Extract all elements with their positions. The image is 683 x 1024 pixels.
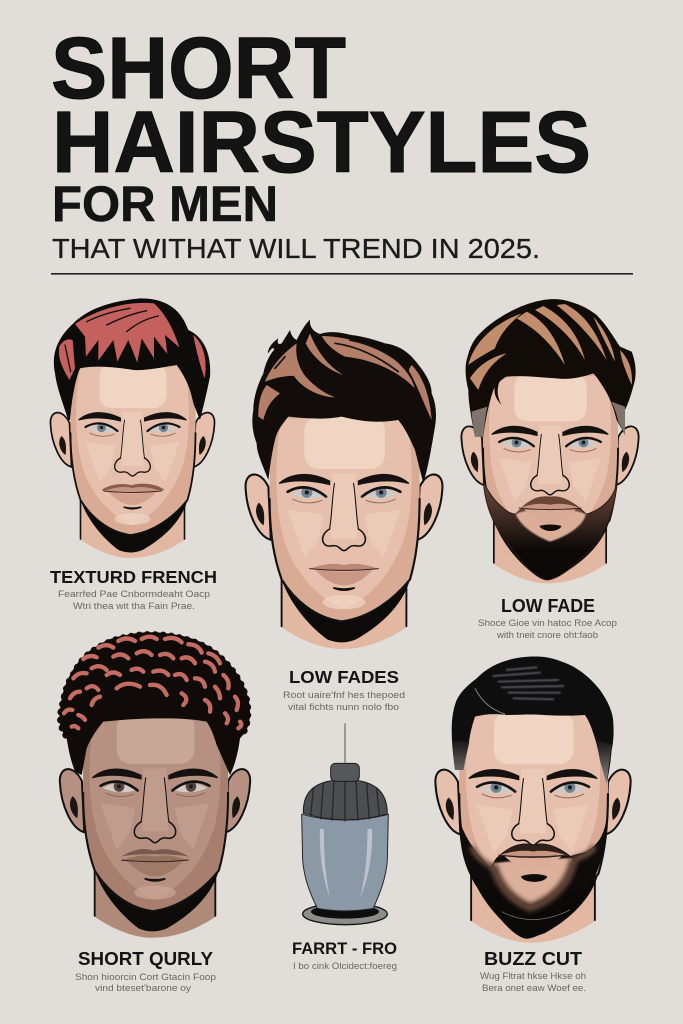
- face illustration: short qurly: [60, 710, 250, 938]
- panel: texturd french: [50, 298, 217, 611]
- description: low fades: vital fichts nunn nolo fbo: [288, 702, 399, 712]
- description: short qurly: [75, 972, 216, 993]
- hair: swept low fade: [466, 299, 636, 437]
- bottle cap: [303, 779, 387, 820]
- mouth: low fade: [519, 504, 581, 523]
- panel: farrt - fro: [292, 723, 397, 971]
- face illustration: low fades: [246, 414, 442, 649]
- mouth: buzz cut: [498, 851, 568, 869]
- hair: red textured crop: [54, 298, 210, 420]
- description: low fade: [478, 618, 617, 640]
- subtitle: for men: FOR MEN: [52, 176, 278, 232]
- face illustration: texturd french: [50, 362, 215, 558]
- tagline: THAT WITHAT WILL TREND IN 2025.: [52, 233, 540, 264]
- description: low fade: with tneit cnore oht:faob: [496, 630, 598, 640]
- description: low fades: Root uaire'fnf hes thepoed: [283, 690, 405, 700]
- description: buzz cut: Bera onet eaw Woef ee.: [482, 983, 586, 993]
- description: farrt - fro: I bo cink Olcidect:foereg: [293, 961, 397, 971]
- beard: low fade: [483, 482, 617, 580]
- description: short qurly: vind bteset'barone oy: [95, 983, 192, 993]
- hair: brown textured quiff: [252, 319, 436, 483]
- face illustration: low fade: [461, 372, 639, 583]
- panel: low fades: [246, 319, 442, 712]
- description: texturd french: Wtri thea wit tha Fain Prae.: [73, 601, 195, 611]
- description: texturd french: Fearrfed Pae Cnbormdeaht Oacp: [58, 589, 210, 599]
- title: short: SHORT: [51, 20, 346, 117]
- description: low fade: Shoce Gioe vin hatoc Roe Acop: [478, 618, 617, 628]
- label: low fade: LOW FADE: [501, 596, 595, 616]
- panel: buzz cut: [435, 657, 631, 993]
- label: texturd french: TEXTURD FRENCH: [50, 567, 217, 587]
- icon: hair product bottle: [302, 723, 388, 925]
- title block: [51, 20, 633, 275]
- face illustration: buzz cut: [435, 709, 631, 943]
- label: farrt - fro: FARRT - FRO: [292, 939, 397, 958]
- label: buzz cut: BUZZ CUT: [484, 949, 582, 969]
- description: low fades: [283, 690, 405, 712]
- description: buzz cut: [480, 971, 586, 993]
- description: buzz cut: Wug Fltrat hkse Hkse oh: [480, 971, 586, 981]
- header rule: [51, 273, 633, 275]
- panel: short qurly: [59, 632, 250, 993]
- hair: short curly: [59, 632, 250, 775]
- panel: low fade: [461, 299, 639, 640]
- label: short qurly: SHORT QURLY: [78, 949, 213, 969]
- description: short qurly: Shon hioorcin Cort Gtacin Foop: [75, 972, 216, 982]
- label: low fades: LOW FADES: [289, 667, 399, 687]
- title: hairstyles: HAIRSTYLES: [52, 94, 591, 191]
- hair: slick short side part: [452, 657, 614, 783]
- bottle body: [302, 814, 388, 911]
- bottle needle: [344, 723, 346, 763]
- description: texturd french: [58, 589, 210, 611]
- bottle base: [303, 903, 387, 925]
- beard: buzz cut: [459, 822, 607, 938]
